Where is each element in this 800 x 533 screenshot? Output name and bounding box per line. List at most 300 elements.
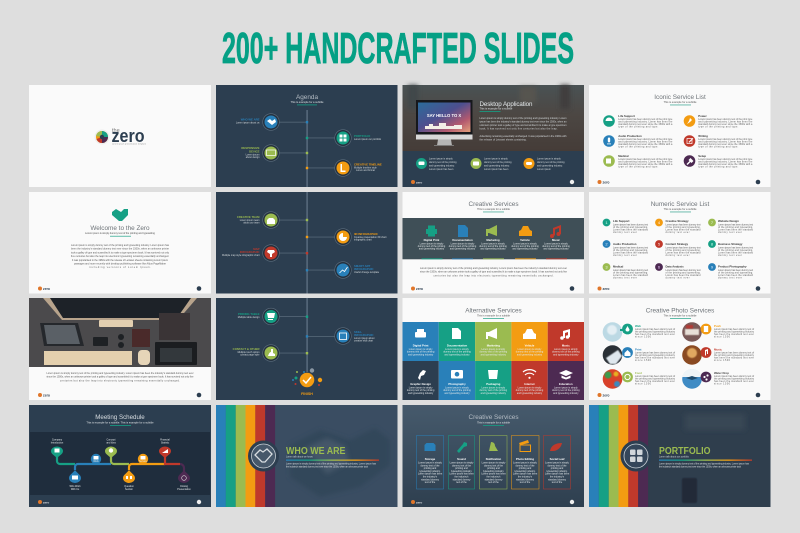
tile: internet: Internet <box>524 382 535 386</box>
node: map infographic: Multiple map style infographic chart <box>222 254 260 257</box>
item 4 <box>655 219 701 234</box>
service: vehicle: Lorem ipsum is simply <box>513 242 538 245</box>
card: photo editing: dummy text of the <box>515 464 535 467</box>
item 8 <box>708 240 754 257</box>
slide: desktop application <box>402 85 584 187</box>
card: sound: text of the <box>456 481 467 484</box>
photo item: photo: Print <box>635 348 641 352</box>
footer logo: zero <box>416 287 423 291</box>
body text: Advertising remaining essentially unchanged. It was popularised in the 1960s with <box>480 135 567 138</box>
item 8: dummy text ever <box>718 254 742 257</box>
item 5: Lorem has been the standard <box>666 252 701 254</box>
item 7: Website Design <box>718 219 739 223</box>
item 6: 6 <box>658 264 661 270</box>
service: setup: Setup <box>698 154 706 158</box>
paragraph: including versions of Lorem Ipsum. <box>89 266 151 269</box>
tile: vehicle: and typesetting industry <box>517 353 543 356</box>
milestone: concept and idea <box>105 438 117 458</box>
service: music: dummy text of the printing <box>542 245 570 248</box>
feature: icon and text 1: Lorem ipsum has been <box>429 168 454 171</box>
photo item: photo: the printing and typesetting industry <box>635 354 676 357</box>
service: power <box>684 114 753 128</box>
card: storage: text of the <box>425 481 436 484</box>
milestone: who we are <box>69 470 81 491</box>
service: audio production: type of the printing and type. <box>618 146 659 148</box>
card: sound: typesetting industry. <box>451 470 472 473</box>
item 3 <box>603 263 649 280</box>
photo item: music: Lorem ipsum has been dummy text of <box>714 352 754 354</box>
photo item: print: since 1500 <box>714 336 731 338</box>
item 8: Lorem ipsum has been dummy text <box>718 246 753 250</box>
paragraph: Lorem ipsum is simply dummy text of the printing and typesetting industry. Lorem ipsum has <box>71 244 170 247</box>
tile: music: Lorem ipsum is simply <box>554 348 578 351</box>
photo item: food <box>603 369 676 389</box>
item 9: 9 <box>711 264 714 270</box>
node: map infographic: MAP <box>253 247 260 251</box>
service: life support: type of the printing and type. <box>618 126 659 128</box>
service: digital print: and typesetting industry <box>419 248 445 251</box>
paragraph <box>71 244 170 269</box>
service: marketing: dummy text of the printing <box>479 245 507 248</box>
node: creative team: about our team <box>243 222 260 224</box>
item 6: Lorem ipsum has been dummy text <box>666 269 701 272</box>
icon: multicolour logo <box>94 130 110 144</box>
node: 3D infographic <box>306 229 387 245</box>
feature: icon and text 3: dummy text of the printing <box>537 161 565 164</box>
rainbow rule <box>659 460 752 461</box>
milestone: financial statistic: Financial <box>160 438 170 442</box>
service: audio production: standard dummy text ever since the 1500s with a <box>618 143 673 146</box>
heading: Numeric Service List <box>651 201 710 208</box>
service: setup <box>684 154 753 168</box>
tile: marketing <box>475 322 511 361</box>
tile: packaging: dummy text of the printing <box>480 389 508 392</box>
paragraph: Lorem ipsum is simply dummy text of the printing and typesetting industry. Lorem ipsum has been the industry's standard dummy text ever <box>46 372 194 375</box>
service: music: and typesetting industry <box>543 248 569 251</box>
item 7: Lorem has been the standard <box>718 228 754 232</box>
photo item: water drop: since 1500 <box>714 382 731 386</box>
item 5: Content Strategy <box>666 242 688 246</box>
heading: Agenda <box>296 94 318 101</box>
card: storage: Lorem ipsum is simply <box>418 462 443 464</box>
tile: education: and typesetting industry <box>553 392 579 395</box>
footer logo <box>38 286 50 291</box>
service: setup: and typesetting industry. Lorem has been the <box>698 160 753 164</box>
tile: graphic design: Lorem ipsum is simply <box>409 386 433 390</box>
slide: agenda: This is example for a subtitle <box>291 100 324 104</box>
node: skill infographic: SKILL <box>354 330 362 334</box>
slide: creative photo services: This is example for a subtitle <box>664 314 697 318</box>
slide: agenda <box>216 85 398 187</box>
heading: Alternative Services <box>465 308 522 314</box>
milestone: financial statistic: Statistic <box>161 442 170 444</box>
page marker <box>570 180 574 184</box>
page marker <box>197 393 201 397</box>
tile: photography <box>439 361 475 400</box>
tile: education: Education <box>559 382 573 386</box>
number list <box>603 219 754 280</box>
heading: Desktop Application <box>480 101 533 108</box>
photo item: food: the printing and typesetting industry <box>635 378 676 380</box>
node: who we are: WHO WE ARE <box>241 118 260 122</box>
item 8: Lorem has been the standard <box>718 252 754 254</box>
service: medical: Lorem ipsum has been dummy text of the print type <box>618 158 673 161</box>
service: life support: Lorem ipsum has been dummy text of the print type <box>618 118 673 121</box>
card: sound: Lorem ipsum is simply <box>450 462 474 464</box>
slide: desk photo <box>29 298 211 400</box>
background photo: rain <box>402 405 584 507</box>
node: creative timeline: CREATIVE TIMELINE <box>354 162 382 166</box>
slide: alternative services <box>402 298 584 400</box>
paragraph <box>420 267 568 277</box>
heading: Creative Photo Services <box>646 308 714 314</box>
card: storage: Storage <box>425 457 436 461</box>
tile: graphic design <box>402 361 439 400</box>
card: social leaf: printing and <box>551 467 564 470</box>
service: medical: standard dummy text ever since the 1500s with a <box>618 163 673 166</box>
slide: creative services band: This is example for a subtitle <box>477 207 510 211</box>
photo item: food: Lorem ipsum has been dummy text of <box>635 375 675 378</box>
tile: photography: Photography <box>448 382 466 386</box>
photo item: food: has been the standard text ever <box>635 380 675 383</box>
footer logo: zero <box>43 287 50 291</box>
item 1: Lorem has been the standard <box>613 228 649 232</box>
tile: vehicle: Lorem ipsum is simply <box>518 348 542 351</box>
item 2: Lorem has been the standard <box>613 252 649 254</box>
milestone: question section <box>123 470 135 491</box>
card: photo editing: Photo Editing <box>516 457 534 461</box>
roadmap path <box>57 453 184 471</box>
heading: WHO WE ARE <box>286 446 346 457</box>
milestone: what we do <box>91 454 101 464</box>
node: skill infographic: Lorem ipsum about <box>354 337 375 340</box>
photo band <box>402 218 584 259</box>
slide: creative services dark <box>402 405 584 507</box>
photo item: water drop <box>682 369 755 389</box>
node: skill infographic <box>306 328 375 344</box>
item 5 <box>655 240 701 257</box>
service: power: Lorem ipsum has been dummy text of the print type <box>698 118 753 121</box>
service: documentation: dummy text of the printing <box>449 245 477 248</box>
photo item: music: since 1500 <box>714 359 731 362</box>
paragraph: since the 1500s, when an unknown printer took a galley of type and scrambled it to make a type specimen book. It has survived not only five <box>420 271 568 274</box>
service: setup: type of the printing and type. <box>698 166 739 168</box>
slide: portfolio divider: Lorem talk about our portfolio <box>659 456 690 458</box>
icon: portfolio badge <box>620 440 652 472</box>
feature: icon and text 1: and typesetting industry. <box>429 164 455 168</box>
feature: icon and text 2: Lorem ipsum has been <box>484 168 509 171</box>
tile: marketing: dummy text of the printing <box>480 351 508 354</box>
slide: creative services band <box>402 192 584 294</box>
icon: imac monitor: SAY HELLO TO X <box>427 113 461 118</box>
service: audio production <box>603 134 673 148</box>
feature: icon and text 3: Lorem ipsum is simply <box>537 158 561 160</box>
photo item: music: Music <box>714 348 722 352</box>
tile: graphic design: Graphic Design <box>410 382 431 386</box>
service: setup: standard dummy text ever since the 1500s with a <box>698 163 753 166</box>
service: marketing: Lorem ipsum is simply <box>481 242 506 245</box>
tile: photography: Lorem ipsum is simply <box>445 386 470 390</box>
heading: Meeting Schedule <box>95 414 145 421</box>
node: pricing table <box>238 308 308 325</box>
photo item: web: the printing and typesetting industry <box>635 330 676 334</box>
node: pricing table: PRICING TABLE <box>238 312 260 316</box>
milestone: company introduction: Company <box>52 438 63 442</box>
tile: packaging <box>475 361 511 400</box>
slide: alternative services: This is example for a subtitle <box>477 314 510 318</box>
photo item: water drop: the printing and typesetting industry <box>714 378 755 380</box>
item 5: 5 <box>658 242 661 246</box>
item 3: 3 <box>605 264 608 270</box>
slide: creative services dark: This is example for a subtitle <box>477 420 510 424</box>
photo item: food: Food <box>635 371 642 375</box>
item 1: of the printing and typesetting. <box>613 226 648 229</box>
finish label: FINISH <box>301 392 313 396</box>
heading: Creative Services <box>468 201 519 208</box>
item 3: Lorem ipsum has been dummy text <box>613 269 648 272</box>
photo item: food: since 1500 <box>635 382 652 386</box>
service: life support: Life Support <box>618 114 635 118</box>
tile: photography: and typesetting industry <box>444 392 470 395</box>
background photo: desk <box>589 405 770 507</box>
logo wordmark: the <box>112 128 120 134</box>
node: contact & other: CONTACT & OTHER <box>233 347 260 351</box>
footer logo <box>38 393 50 398</box>
milestone: question section: Question <box>124 485 134 488</box>
card: social leaf: standard dummy <box>548 478 567 481</box>
node: creative team: Lorem ipsum team <box>240 219 260 222</box>
node: map infographic <box>222 245 308 261</box>
card: social leaf: Lorem ipsum has been <box>545 473 570 476</box>
slide: who we are divider: Lorem talk about we know <box>286 456 313 458</box>
heading: Creative Services <box>468 414 519 421</box>
timeline spine <box>306 110 308 187</box>
heading: PORTFOLIO <box>659 446 711 457</box>
footer logo <box>598 286 609 291</box>
page marker <box>756 393 760 397</box>
feature: icon and text 3: Lorem ipsum <box>537 168 551 171</box>
card: social leaf: dummy text of the <box>547 464 567 467</box>
item 9: dummy text ever <box>718 276 742 280</box>
item 5: Lorem ipsum has been dummy text <box>666 246 701 250</box>
timeline spine <box>306 298 308 372</box>
service: writing: Lorem ipsum has been dummy text of the print type <box>698 138 753 141</box>
card: social leaf: text of the <box>552 481 563 484</box>
item 7: 7 <box>711 220 714 225</box>
footer logo <box>411 500 422 504</box>
node: responsive device: about design <box>246 156 260 159</box>
node: creative team: CREATIVE TEAM <box>237 215 260 219</box>
milestone: company introduction <box>51 438 64 458</box>
footer logo: zero <box>602 287 609 291</box>
paragraph: five centuries but also the leap into electronic typesetting remaining essentially unchanged. <box>71 255 169 258</box>
tile: digital print: dummy text of the printing <box>407 351 435 354</box>
milestone: closing presentation: Presentation <box>177 488 191 491</box>
service: marketing: and typesetting industry <box>480 248 506 251</box>
paragraph: centuries but also the leap into electronic typesetting remaining essentially unchanged. <box>434 274 554 277</box>
paragraph: passages and more recently with desktop publishing software like Aldus PageMaker <box>74 262 166 266</box>
node: pricing table: Multiple table design <box>238 316 260 319</box>
service: documentation: Documentation <box>452 238 473 242</box>
card: notification: printing and <box>487 467 500 470</box>
node: skill infographic: creative skill chart <box>354 340 373 342</box>
service: life support <box>603 114 673 128</box>
slide: meeting schedule <box>29 405 211 507</box>
node: who we are: Lorem ipsum about us <box>236 122 260 124</box>
feature: icon and text 2: and typesetting industry. <box>484 164 510 168</box>
milestone: service <box>138 454 148 464</box>
colour stripes <box>589 405 648 507</box>
slide: agenda continued <box>216 192 398 294</box>
dark content band <box>30 432 210 495</box>
node: creative timeline <box>306 160 382 176</box>
tile: marketing: and typesetting industry <box>481 353 507 356</box>
node: 3D infographic: 3D INFOGRAPHIC <box>354 232 378 236</box>
node: creative timeline: Multiple timeline style <box>354 166 377 170</box>
card: social leaf: typesetting industry. <box>546 470 568 473</box>
item 7: of the printing and typesetting. <box>718 226 753 229</box>
tile: education: dummy text of the printing <box>552 389 580 392</box>
tile: vehicle <box>511 322 548 361</box>
item 6: of the printing and typesetting. <box>666 272 701 274</box>
node: 3D infographic: infographic chart <box>354 238 372 242</box>
page marker <box>756 286 760 291</box>
item 3: Medical <box>613 264 623 268</box>
body text: unknown printer took a galley of type and scrambled it to make a type specimen <box>480 124 567 127</box>
paragraph: since the 1500s, when an unknown printer took a galley of type and scrambled it to make a type specimen book. It has survived not only five <box>46 376 194 379</box>
background photo: handshake <box>216 405 398 507</box>
card: notification <box>480 436 507 489</box>
card: social leaf <box>544 436 570 489</box>
tile: packaging: and typesetting industry <box>481 392 507 395</box>
icon: handshake badge <box>248 440 279 472</box>
heading: Welcome to the Zero <box>90 225 150 232</box>
description: the industry's standard dummy text ever since the 1500s, when an unknown printer took <box>659 466 742 468</box>
node: responsive device: RESPONSIVE <box>241 146 260 150</box>
item 1 <box>603 219 649 234</box>
page marker <box>756 180 760 184</box>
service: power: standard dummy text ever since the 1500s with a <box>698 123 753 126</box>
footer logo: zero <box>602 180 609 184</box>
service: writing: Writing <box>698 134 708 138</box>
tile: marketing: Lorem ipsum is simply <box>481 348 506 351</box>
card: storage: standard dummy <box>421 478 440 481</box>
photo item: water drop: has been the standard text ever <box>714 380 754 383</box>
icon: finish badge with confetti <box>292 368 322 387</box>
item 9: Lorem has been the standard <box>718 274 754 277</box>
card: photo editing: printing and <box>519 467 532 470</box>
page marker <box>197 286 201 291</box>
item 4: Lorem has been the standard <box>666 228 701 232</box>
service: digital print <box>418 226 446 251</box>
service: medical: Medical <box>618 154 629 158</box>
photo item: web: Lorem ipsum has been dummy text of <box>635 328 675 331</box>
feature: icon and text 3: and typesetting industry. <box>537 164 563 168</box>
slide: iconic service list: This is example for a subtitle <box>664 100 697 104</box>
node: 3D infographic: Creative presentation 3D chart <box>354 236 387 239</box>
feature: icon and text 1: Lorem ipsum is simply <box>429 158 453 160</box>
card: photo editing: Lorem ipsum is simply <box>513 462 538 464</box>
service: vehicle: dummy text of the printing <box>511 245 539 248</box>
slide: welcome to the zero: Lorem ipsum is simply dummy text of the printing and typesetting <box>85 231 156 235</box>
service: audio production: and typesetting industry. Lorem has been the <box>618 140 673 144</box>
service: life support: and typesetting industry. Lorem has been the <box>618 120 673 124</box>
item 2: Lorem ipsum has been dummy text <box>613 246 648 250</box>
card: sound: dummy text of the <box>452 464 472 467</box>
slide: the zero logo cover <box>29 85 211 187</box>
item 6: Data Analysis <box>666 264 684 268</box>
service: setup: Lorem ipsum has been dummy text of the print type <box>698 158 753 161</box>
footer logo <box>411 286 423 291</box>
tile: documentation: Lorem ipsum is simply <box>445 348 470 351</box>
milestone: who we are: With Us <box>71 488 80 491</box>
footer logo: zero <box>43 500 49 504</box>
photo item: print: has been the standard text ever <box>714 333 754 336</box>
tile: packaging: Packaging <box>486 382 501 386</box>
footer logo <box>38 500 49 504</box>
tile: vehicle: Vehicle <box>525 344 535 348</box>
tile: documentation: Documentation <box>447 344 467 348</box>
node: smart art <box>306 262 380 278</box>
item 1: 1 <box>605 220 608 225</box>
service: music <box>542 225 570 251</box>
tile: music <box>548 322 584 361</box>
node: responsive device: Lorem ipsum <box>246 154 260 156</box>
service: vehicle: and typesetting industry <box>512 248 538 251</box>
item 3: dummy text ever <box>613 276 637 280</box>
service: digital print: dummy text of the printing <box>418 245 446 248</box>
node: creative timeline: Lorem and format <box>356 169 375 172</box>
card: sound: standard dummy <box>453 478 471 481</box>
node: smart art: SMART ART <box>354 264 371 268</box>
service: medical: type of the printing and type. <box>618 166 659 168</box>
tile: internet <box>511 361 548 400</box>
item 9: of the printing and typesetting. <box>718 272 753 274</box>
photo item: water drop: Lorem ipsum has been dummy text of <box>714 375 754 378</box>
item 3: of the printing and typesetting. <box>613 272 648 274</box>
card: social leaf: Lorem ipsum is simply <box>545 462 570 464</box>
feature: icon and text 2: dummy text of the printing <box>484 161 512 164</box>
card: sound: the industry's <box>454 476 469 478</box>
milestone: service: Service <box>139 460 148 463</box>
photo item: water drop: Water Drop <box>714 371 729 375</box>
service: documentation: and typesetting industry <box>450 248 476 251</box>
node: responsive device: DEVICE <box>249 150 260 154</box>
item 2: 2 <box>605 242 608 246</box>
item 7 <box>708 219 754 234</box>
paragraph <box>46 372 194 382</box>
tile: graphic design: dummy text of the printing <box>407 389 435 392</box>
body text: book. It has survived not only five centuries but also the leap. <box>480 128 558 130</box>
card: notification: the industry's <box>486 476 501 478</box>
node: who we are <box>236 114 308 130</box>
node: contact & other: contact page style <box>240 354 260 356</box>
card: social leaf: the industry's <box>550 476 565 478</box>
footer band <box>402 151 584 187</box>
item 9: Lorem ipsum has been dummy text <box>718 269 753 272</box>
item 7: Lorem ipsum has been dummy text <box>718 224 753 226</box>
service: documentation <box>449 225 477 251</box>
item 5: dummy text ever <box>666 254 690 257</box>
paragraph: been the industry's standard dummy text ever since the 1500s, when an unknown printer <box>71 248 169 251</box>
tile: digital print: Lorem ipsum is simply <box>409 348 433 351</box>
paragraph: It was popularised in the 1960s with the release of Letraset sheets containing Lorem Ipsum <box>72 259 168 262</box>
item 2: Audio Production <box>613 242 637 246</box>
card: photo editing: standard dummy <box>516 478 535 481</box>
feature: icon and text 1 <box>416 158 457 171</box>
tile: music: and typesetting industry <box>553 353 579 356</box>
tile: music: dummy text of the printing <box>552 351 580 354</box>
